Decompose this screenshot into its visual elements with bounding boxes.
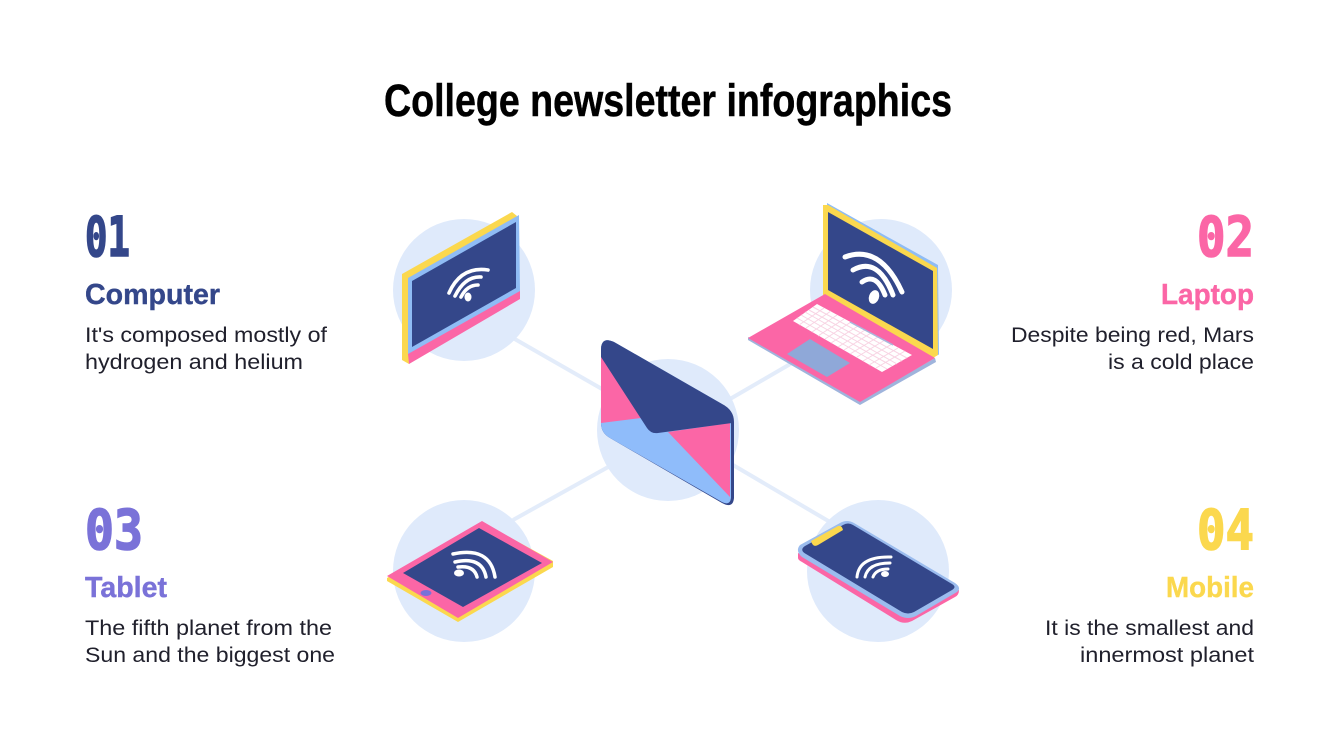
description: mobile: innermost planet — [1080, 643, 1254, 667]
keyboard — [793, 304, 912, 372]
description: computer: It's composed mostly of — [85, 323, 327, 347]
phone notch — [811, 526, 843, 546]
panel: mobile text — [1045, 498, 1254, 667]
description: laptop: is a cold place — [1108, 350, 1254, 374]
tablet button — [420, 590, 432, 596]
trackpad — [787, 339, 850, 377]
panel: computer text — [85, 205, 327, 374]
description: laptop: Despite being red, Mars — [1011, 323, 1254, 347]
icon: wifi on phone — [857, 557, 891, 577]
icon: mobile phone — [798, 521, 959, 623]
number 02: 02 — [1197, 205, 1254, 269]
background circles — [393, 219, 952, 642]
heading: computer: Computer — [85, 279, 220, 311]
icon: laptop — [748, 203, 939, 405]
panel: laptop text — [1011, 205, 1254, 374]
icon: wifi on computer — [449, 269, 488, 302]
heading: laptop: Laptop — [1161, 279, 1254, 311]
connector lines — [513, 338, 830, 522]
number 03: 03 — [85, 498, 143, 562]
description: mobile: It is the smallest and — [1045, 616, 1254, 640]
heading: tablet: Tablet — [85, 572, 167, 604]
icon: computer monitor — [402, 212, 520, 364]
number 04: 04 — [1197, 498, 1254, 562]
icon: tablet — [387, 521, 553, 622]
panel: tablet text — [85, 498, 335, 667]
icon: envelope — [601, 340, 734, 505]
title: College newsletter infographics — [384, 75, 952, 126]
heading: mobile: Mobile — [1166, 572, 1254, 604]
number 01: 01 — [85, 205, 130, 269]
icon: wifi on tablet — [453, 552, 495, 577]
description: tablet: The fifth planet from the — [85, 616, 332, 640]
description: computer: hydrogen and helium — [85, 350, 303, 374]
icon: wifi on laptop — [845, 254, 902, 305]
description: tablet: Sun and the biggest one — [85, 643, 335, 667]
